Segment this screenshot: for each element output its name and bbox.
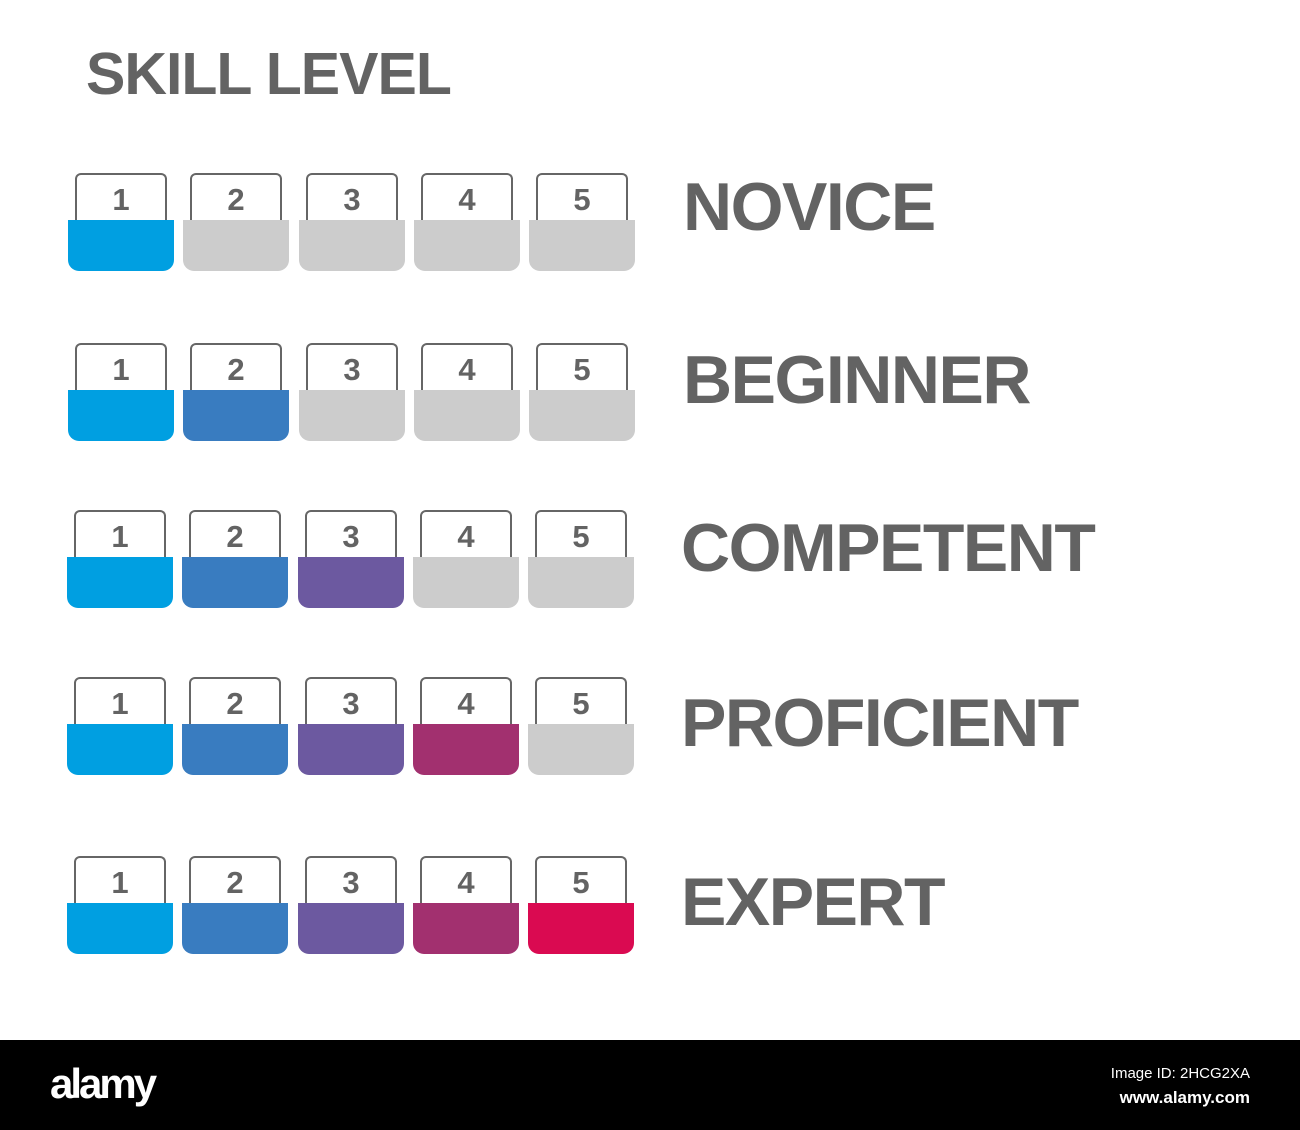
row: expert: 3 bbox=[342, 865, 360, 900]
row: expert: 4 bbox=[457, 865, 475, 900]
row: expert: 2 bbox=[226, 865, 244, 900]
row: beginner: 2 bbox=[227, 352, 245, 387]
label: proficient: PROFICIENT bbox=[681, 685, 1078, 761]
label: beginner: BEGINNER bbox=[683, 342, 1030, 418]
row: proficient: 2 bbox=[226, 686, 244, 721]
row: novice: 4 bbox=[458, 182, 476, 217]
row: proficient bbox=[67, 677, 634, 775]
row: competent bbox=[67, 510, 634, 608]
row: proficient: 1 bbox=[111, 686, 129, 721]
label: novice: NOVICE bbox=[683, 169, 935, 245]
row: novice: 5 bbox=[573, 182, 591, 217]
label: expert: EXPERT bbox=[681, 864, 944, 940]
row: competent: 1 bbox=[111, 519, 129, 554]
row: competent: 5 bbox=[572, 519, 590, 554]
row: novice: 3 bbox=[343, 182, 361, 217]
footer info: www.alamy.com bbox=[1120, 1088, 1250, 1107]
footer info bbox=[1111, 1065, 1250, 1107]
row: beginner: 4 bbox=[458, 352, 476, 387]
row: novice: 1 bbox=[112, 182, 130, 217]
row: novice: 2 bbox=[227, 182, 245, 217]
row: beginner: 3 bbox=[343, 352, 361, 387]
footer bar bbox=[0, 1040, 1300, 1130]
label: competent: COMPETENT bbox=[681, 510, 1094, 586]
row: expert bbox=[67, 856, 634, 954]
row: beginner: 1 bbox=[112, 352, 130, 387]
row: competent: 3 bbox=[342, 519, 360, 554]
row: competent: 2 bbox=[226, 519, 244, 554]
row: expert: 5 bbox=[572, 865, 590, 900]
row: expert: 1 bbox=[111, 865, 129, 900]
row: beginner bbox=[68, 343, 635, 441]
footer info: Image ID: 2HCG2XA bbox=[1111, 1065, 1250, 1082]
title: SKILL LEVEL bbox=[86, 41, 451, 107]
row: proficient: 5 bbox=[572, 686, 590, 721]
row: novice bbox=[68, 173, 635, 271]
row: proficient: 4 bbox=[457, 686, 475, 721]
row: proficient: 3 bbox=[342, 686, 360, 721]
row: beginner: 5 bbox=[573, 352, 591, 387]
row: competent: 4 bbox=[457, 519, 475, 554]
footer logo: alamy bbox=[50, 1060, 154, 1107]
